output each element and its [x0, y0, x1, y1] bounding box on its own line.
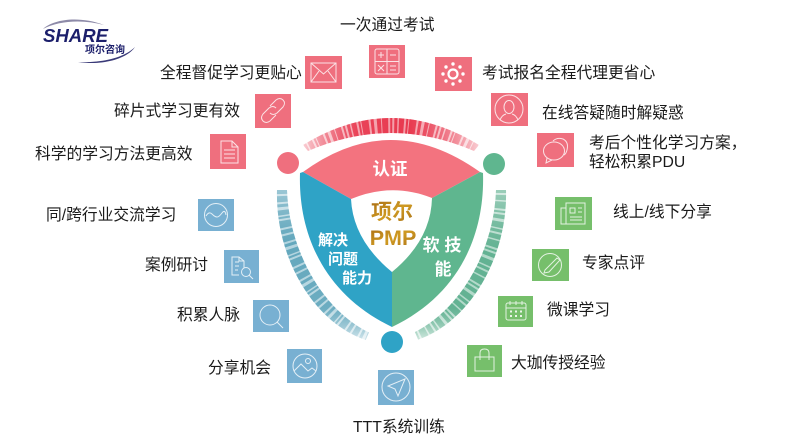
- text: 积累人脉: 积累人脉: [177, 306, 240, 324]
- icon: pencil circle: [532, 249, 569, 281]
- shield: 软技能 segment: [392, 172, 483, 327]
- dot: blue: [381, 331, 403, 353]
- text: 同/跨行业交流学习: 同/跨行业交流学习: [46, 206, 176, 224]
- icon: chat bubbles: [537, 133, 574, 167]
- icon: user: [491, 93, 528, 126]
- logo: SHARE 项尔咨询: 项尔咨询: [85, 43, 125, 56]
- label: 能: 能: [434, 260, 452, 279]
- dot: green: [483, 153, 505, 175]
- text: 碎片式学习更有效: 碎片式学习更有效: [114, 102, 240, 120]
- text: 微课学习: 微课学习: [547, 301, 610, 319]
- icon: calendar: [498, 296, 533, 327]
- center label: 项尔 PMP: PMP: [370, 226, 416, 250]
- text: 全程督促学习更贴心: 全程督促学习更贴心: [160, 64, 302, 82]
- text: 案例研讨: 案例研讨: [145, 256, 208, 274]
- icon: calculator: [369, 45, 405, 78]
- text: 线上/线下分享: 线上/线下分享: [613, 203, 712, 221]
- text: 考后个性化学习方案，轻松积累PDU: [589, 134, 746, 171]
- label: 问题: 问题: [328, 251, 358, 268]
- icon: link: [255, 94, 291, 128]
- left barcode arc: blue: [282, 190, 367, 337]
- text: 考试报名全程代理更省心: 考试报名全程代理更省心: [482, 64, 655, 82]
- shield: 解决问题能力 segment: [300, 172, 392, 327]
- icon: gear dots: [435, 57, 472, 91]
- icon: document search: [224, 250, 259, 283]
- text: TTT系统训练: TTT系统训练: [353, 418, 445, 436]
- center label: 项尔 PMP: [370, 201, 416, 250]
- text: 科学的学习方法更高效: 科学的学习方法更高效: [35, 145, 193, 163]
- logo: SHARE 项尔咨询: SHARE: [43, 26, 109, 46]
- label: 认证: 认证: [372, 159, 408, 179]
- center label: 项尔 PMP: 项尔: [371, 201, 413, 224]
- text: 考后个性化学习方案，轻松积累PDU: 考后个性化学习方案，: [589, 134, 746, 152]
- shield: 认证 segment: [303, 140, 480, 199]
- top barcode arc: red: [305, 126, 477, 148]
- text: 分享机会: 分享机会: [208, 359, 271, 377]
- text: 考后个性化学习方案，轻松积累PDU: 轻松积累PDU: [589, 153, 685, 171]
- heading: 一次通过考试: 一次通过考试: [340, 16, 435, 34]
- icon: wave circle: [198, 199, 234, 231]
- icon: landscape: [287, 349, 322, 383]
- icon: navigation: [378, 370, 414, 405]
- icon: document: [210, 134, 246, 169]
- icon: magnifier: [253, 300, 289, 332]
- icon: envelope: [305, 56, 342, 89]
- text: 专家点评: 专家点评: [582, 254, 645, 272]
- logo: SHARE 项尔咨询: [43, 19, 135, 63]
- label: 能力: 能力: [342, 269, 372, 287]
- text: 在线答疑随时解疑惑: 在线答疑随时解疑惑: [542, 104, 684, 122]
- icon: newspaper: [555, 197, 592, 230]
- icon: shopping bag: [467, 345, 502, 377]
- dot: red: [277, 152, 299, 174]
- label: 解决: 解决: [318, 231, 348, 249]
- label: 软 技: 软 技: [423, 236, 461, 255]
- text: 大珈传授经验: 大珈传授经验: [511, 354, 606, 372]
- right barcode arc: green: [417, 190, 501, 337]
